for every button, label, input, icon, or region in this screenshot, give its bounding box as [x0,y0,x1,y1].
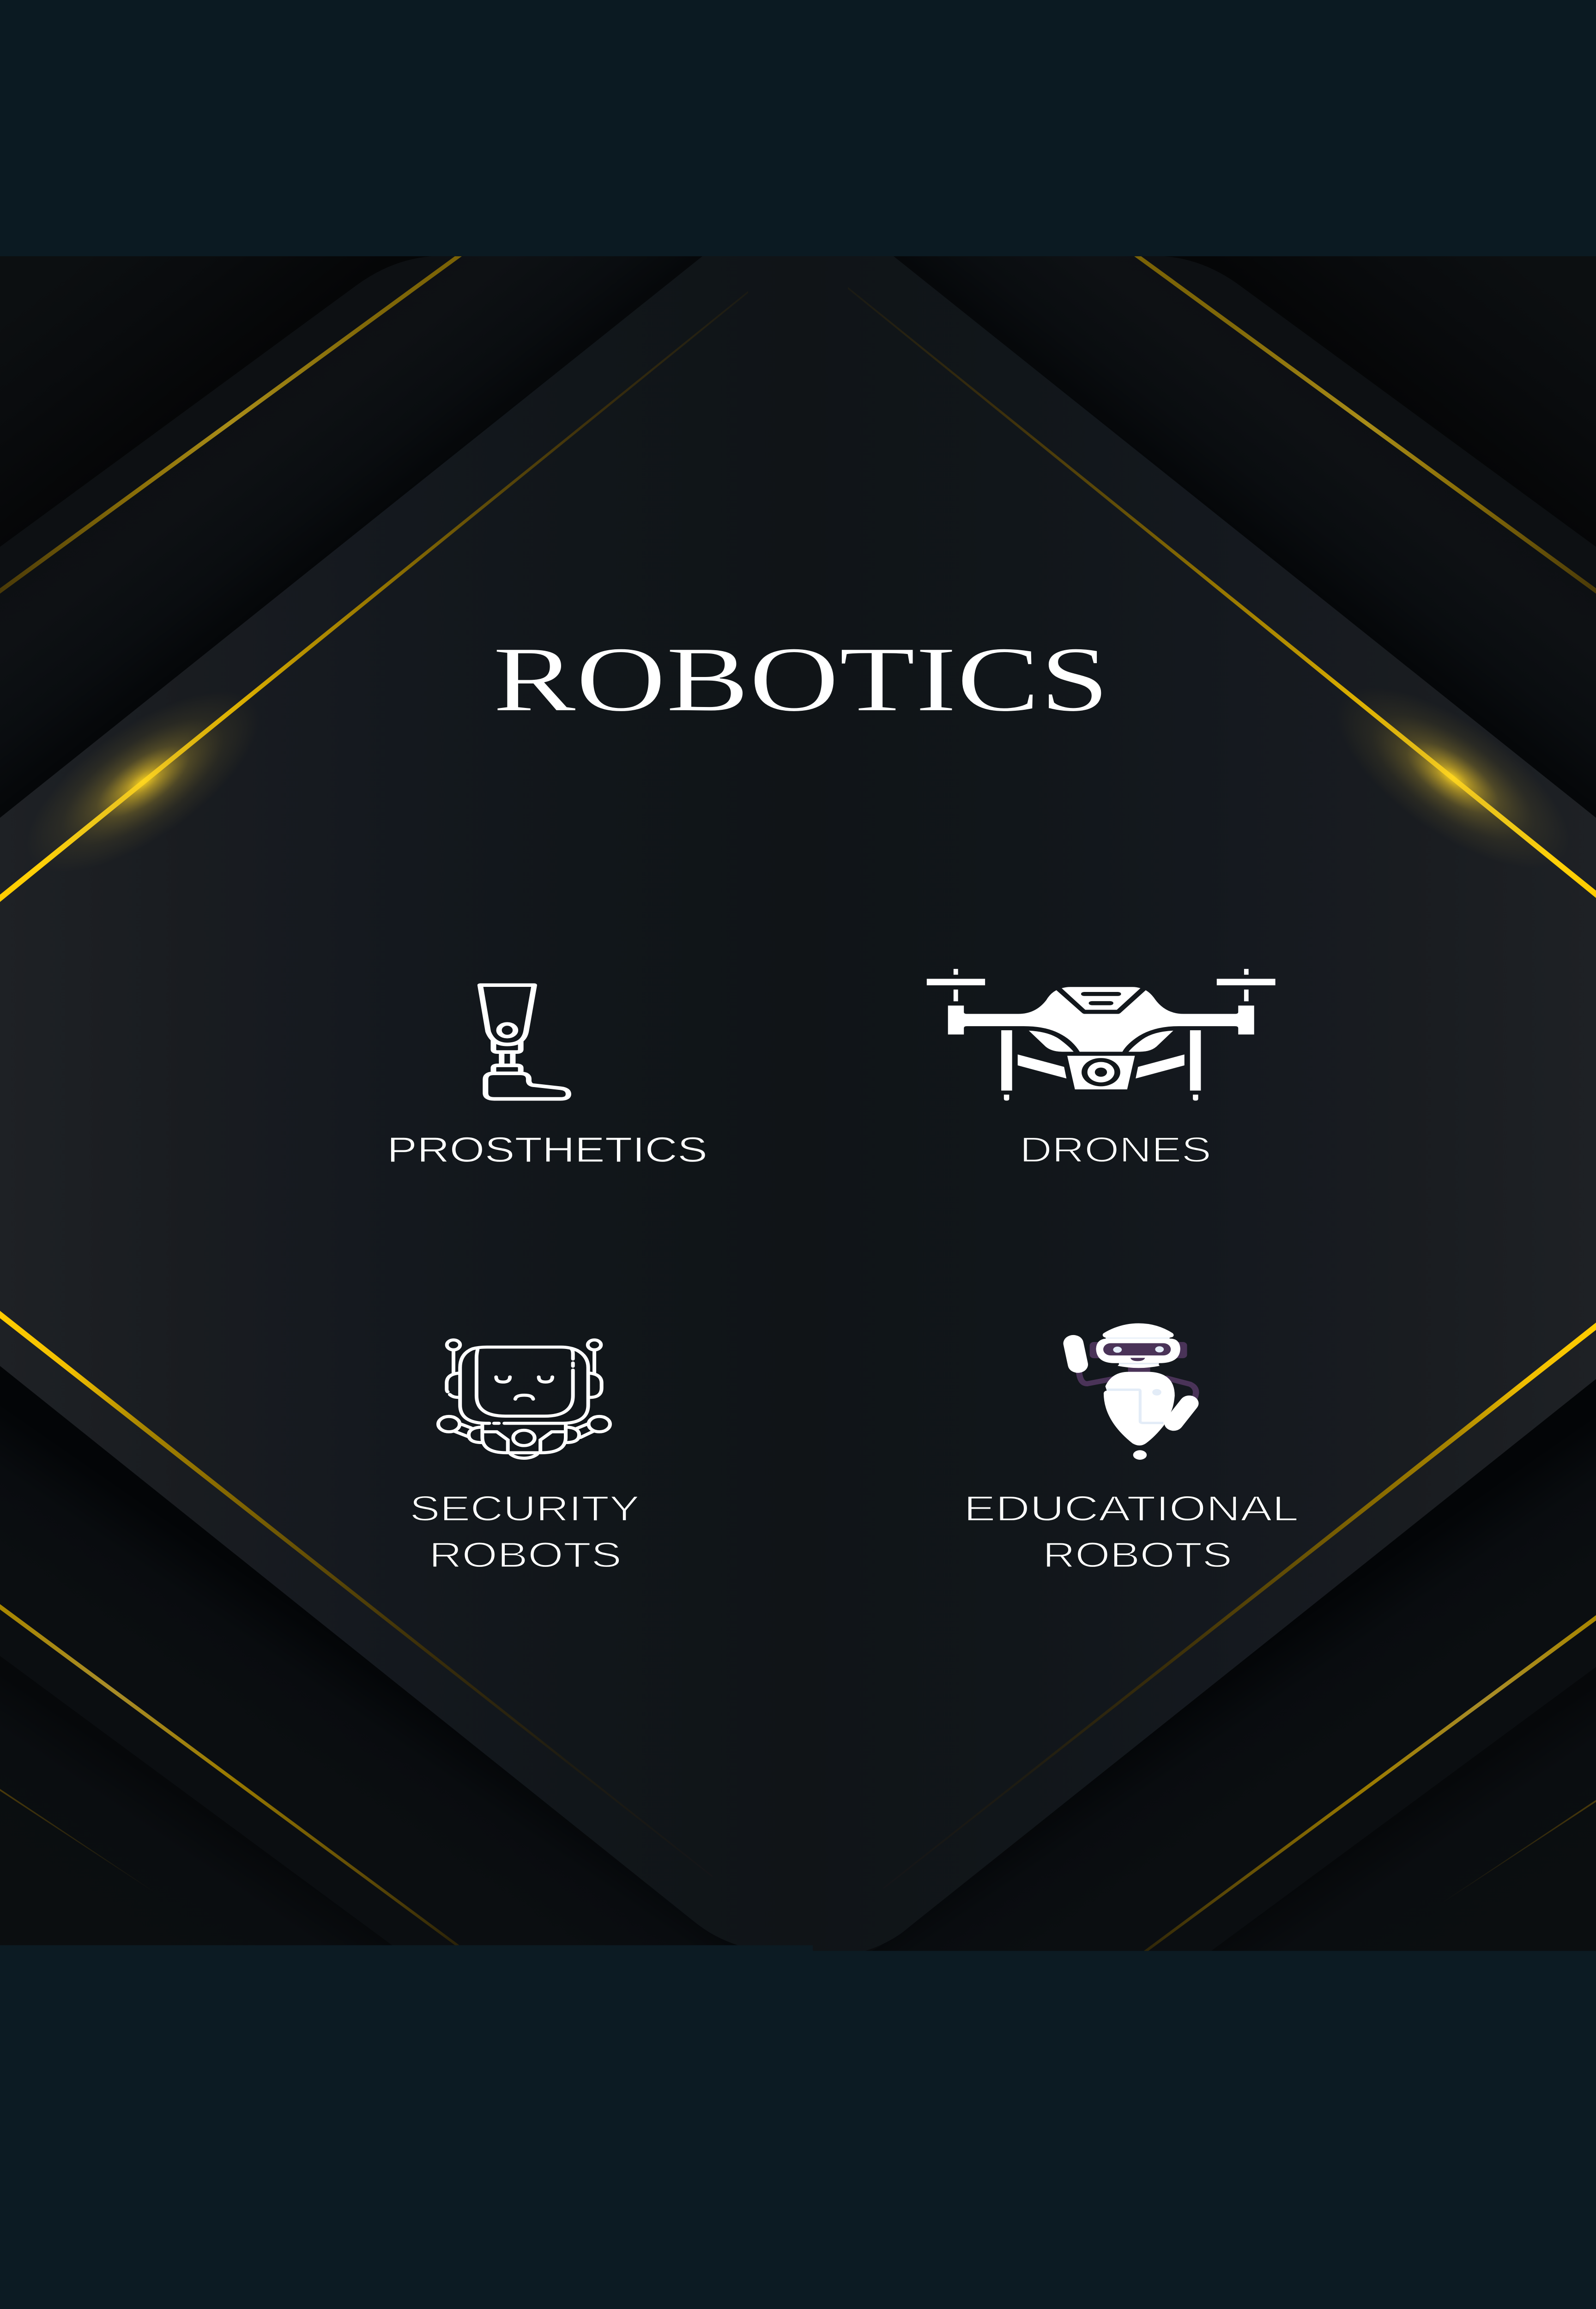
label: educational robots: EDUCATIONAL [964,1488,1299,1528]
label: drones: DRONES [1020,1130,1211,1169]
icon: prosthetic leg [480,985,568,1099]
top left main gold line with glow [0,291,748,902]
icon: drone [927,969,1276,1100]
label: security robots [410,1488,640,1575]
bottom right dark stripes with gold lines [858,1377,1596,1957]
title: ROBOTICS [493,628,1109,731]
label: security robots: SECURITY [410,1488,640,1528]
icon: educational robot [1073,1323,1196,1460]
bottom left main gold line [0,1311,713,1877]
top left dark stripes with gold line [0,256,702,818]
bottom navy band [0,1945,1596,2309]
bottom right main gold line [883,1323,1596,1889]
icon: security robot [438,1340,610,1458]
top right main gold line with glow [848,287,1596,898]
top navy band [0,0,1596,256]
label: educational robots [964,1488,1299,1575]
label: educational robots: ROBOTS [1043,1535,1232,1575]
label: prosthetics: PROSTHETICS [387,1130,707,1169]
top right dark stripes with gold line [894,256,1596,818]
central diamond panel [0,256,1596,1951]
label: security robots: ROBOTS [429,1535,622,1575]
dark background base [0,256,1596,1951]
bottom left dark stripes with gold lines [0,1366,738,1946]
